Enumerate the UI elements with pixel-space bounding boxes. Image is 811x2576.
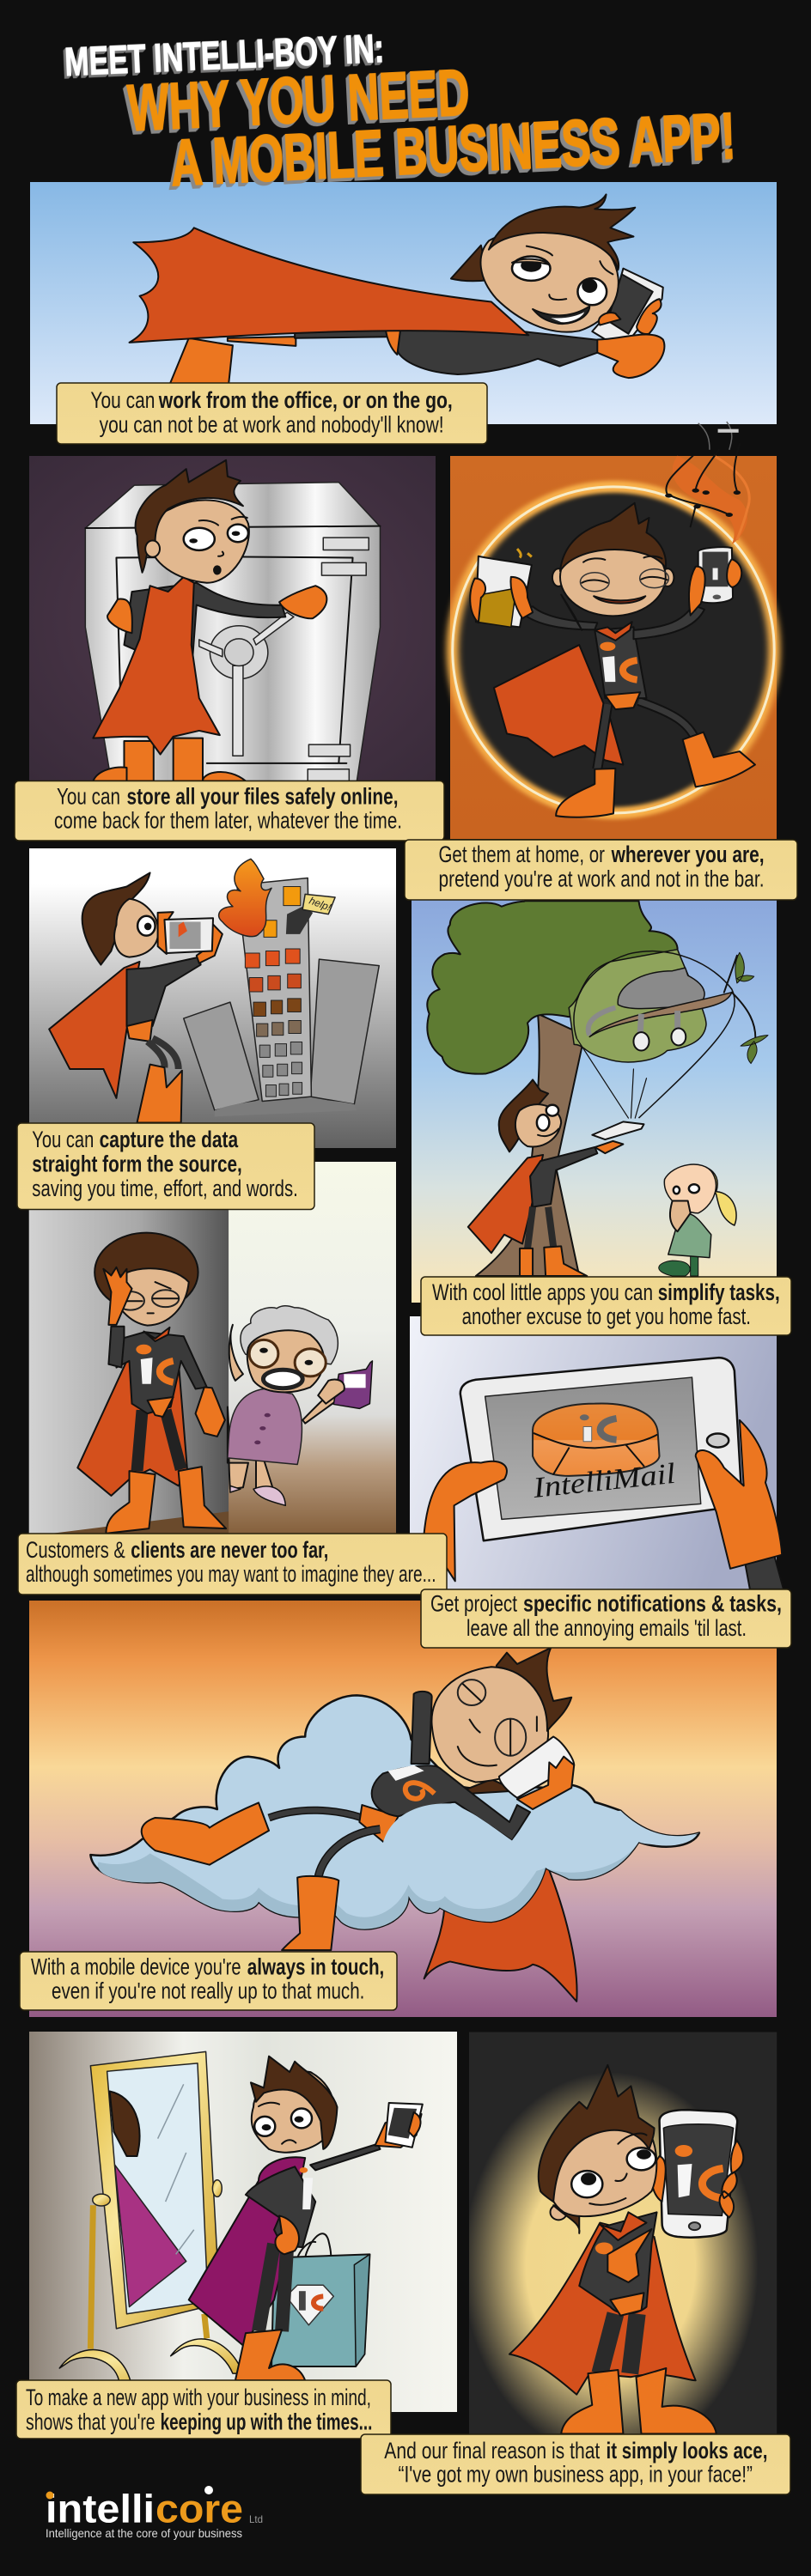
callout: clients never too far: clients are never too far, [131,1537,328,1563]
callout: work from the office: you can not be at work and nobody'll know! [100,412,444,438]
text: help sign: help! [308,895,333,914]
illustration: tablet held by hands [424,1358,784,1589]
callout: keeping up with the times: To make a new app with your business in mind, [26,2385,371,2410]
text: IntelliMail: IntelliMail [531,1458,677,1504]
logo: intellicore [46,2486,263,2540]
callout: wherever you are: Get them at home, or [438,841,605,867]
callout: capture the data: saving you time, effort, and words. [32,1176,298,1201]
panel: capture the data [29,848,396,1148]
callout: store files: You can [57,783,120,809]
logo: intellicore: Intelligence at the core of your business [46,2526,242,2540]
callout: work from the office: work from the office, or on the go, [158,387,453,413]
callout: it simply looks ace [361,2434,790,2494]
panel: tree and cat [412,893,777,1303]
illustration: vault with figure [85,460,380,781]
callout: clients never too far [18,1534,447,1595]
callout: capture the data: capture the data [100,1127,239,1152]
panel: tablet IntelliMail [410,1316,784,1589]
callout: capture the data [17,1123,314,1209]
callout: clients never too far: although sometimes you may want to imagine they are... [26,1561,436,1587]
figure: flying Intelli-Boy [129,194,664,385]
callout: notifications and tasks [421,1589,791,1648]
callout: keeping up with the times: shows that you're [26,2409,155,2434]
callout: clients never too far: Customers & [26,1537,125,1563]
panel: flying with phone [30,182,777,424]
title line: Meet Intelli-Boy in: MEET INTELLI-BOY IN: [64,26,385,84]
callout: keeping up with the times: keeping up with the times... [161,2409,372,2434]
callout: store files [15,781,444,841]
illustration: burning buildings [49,859,379,1122]
callout: simplify tasks [421,1277,791,1335]
callout: work from the office [57,383,487,444]
illustration: hero resting on cloud [90,1648,699,2002]
illustration: column, hero and old lady [29,1210,372,1534]
panel: beer and phone [450,422,777,839]
callout: capture the data: straight form the source, [32,1151,242,1177]
panel: safe [29,456,436,781]
illustration: glowing circle with figure [453,422,774,817]
logo: intellicore: core [155,2487,243,2531]
title [64,26,737,200]
illustration: mirror, hero and shopping bag [59,2051,423,2380]
callout: wherever you are [405,840,797,900]
callout: always in touch [20,1952,397,2010]
logo: intellicore: Ltd [249,2513,263,2525]
callout: wherever you are: wherever you are, [611,841,765,867]
logo: intellicore: intelli [46,2487,155,2531]
callout: store files: come back for them later, whatever the time. [54,807,402,833]
callout: store files: store all your files safely online, [127,783,399,809]
callout: work from the office: You can [90,387,155,413]
callout: simplify tasks: With cool little apps you can [432,1279,653,1305]
panel: old lady [29,1162,396,1534]
illustration: glow and hero showing phone [469,2032,777,2433]
panel: sleeping on a cloud [29,1601,777,2017]
callout: always in touch: even if you're not really up to that much. [52,1978,364,2004]
callout: it simply looks ace: And our final reason is that [384,2438,601,2464]
panel: mirror [29,2032,457,2412]
callout: always in touch: always in touch, [247,1954,384,1980]
callout: capture the data: You can [32,1127,94,1152]
panel: in your face [469,2032,777,2434]
callout: always in touch: With a mobile device you're [31,1954,241,1980]
title line: Why you need: WHY YOU NEED [126,56,471,145]
callout: notifications and tasks: Get project [430,1590,517,1616]
illustration: tree, cat and girl [427,901,768,1276]
callout: keeping up with the times [16,2380,391,2439]
